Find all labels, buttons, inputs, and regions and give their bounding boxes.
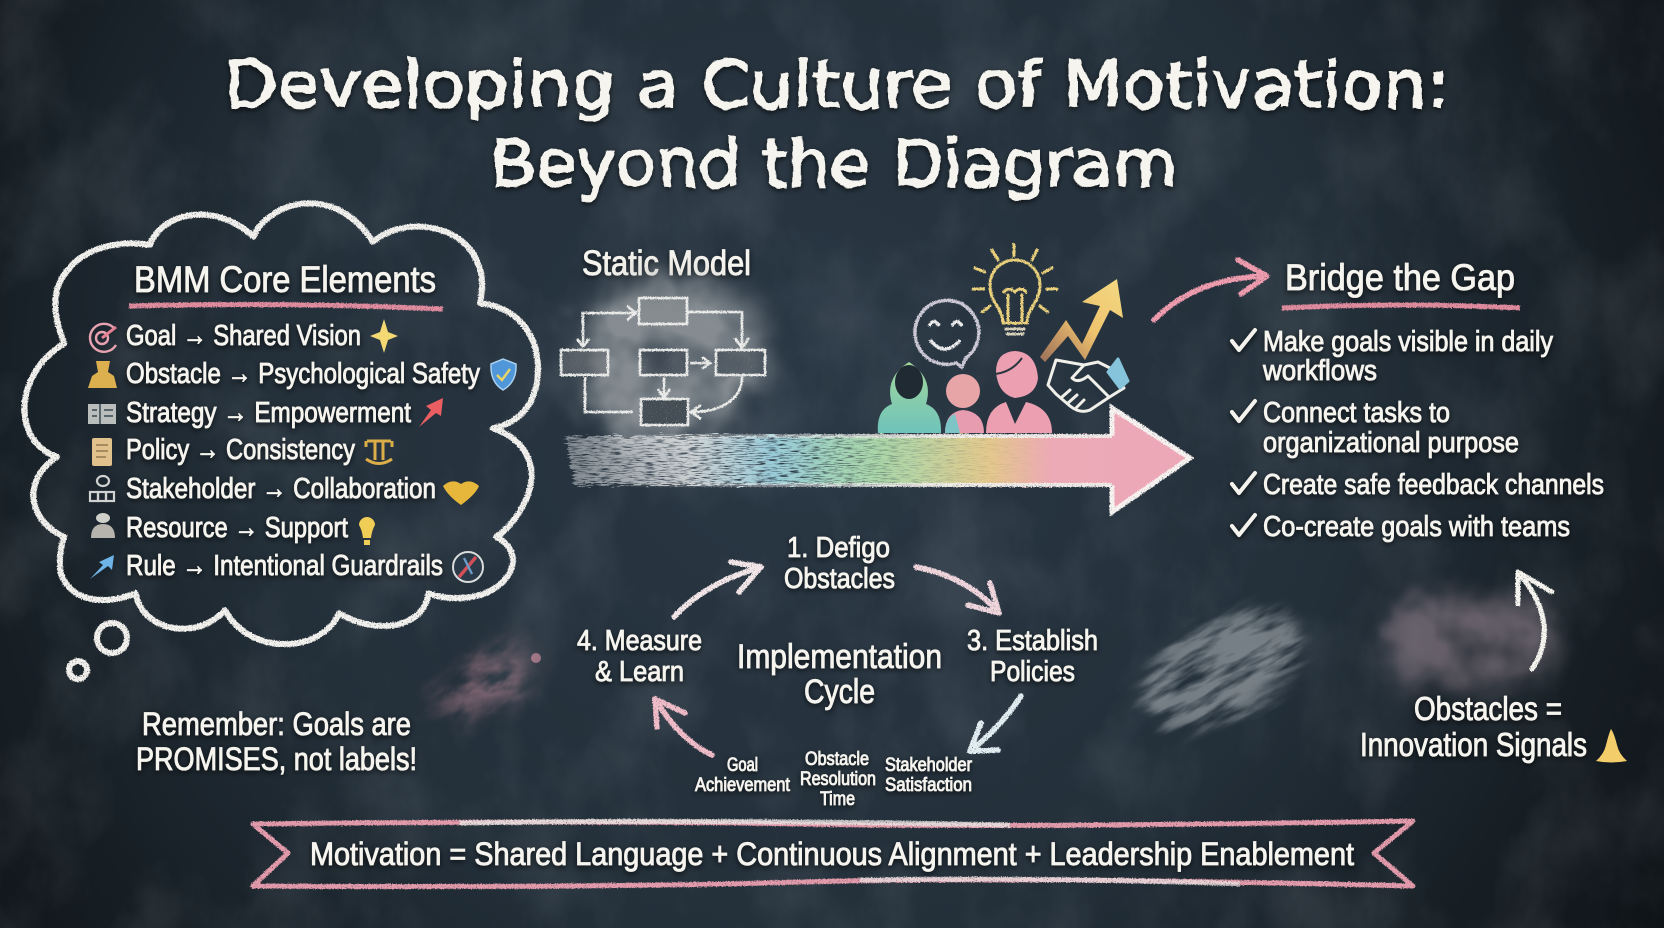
pink arrow to bridge the gap — [1154, 260, 1267, 320]
person: child — [945, 374, 984, 433]
static model label: Static Model — [582, 244, 751, 283]
note: obstacles are innovation signals: Innovation Signals — [1360, 726, 1587, 763]
panel: bridge the gap — [1232, 257, 1604, 543]
upward arrow from obstacles — [1518, 572, 1552, 669]
person: adult pink — [986, 351, 1052, 433]
measurement metrics: Achievement — [695, 775, 791, 796]
banner: motivation formula — [253, 821, 1413, 886]
title — [224, 49, 1450, 202]
heading: Bridge the Gap — [1285, 257, 1515, 298]
icon: bell — [1596, 729, 1627, 762]
reminder note — [136, 706, 417, 777]
reminder note: Remember: Goals are — [142, 706, 411, 742]
transformation rainbow arrow — [566, 408, 1190, 512]
people group — [878, 351, 1052, 433]
background chalk smudges — [435, 586, 1558, 750]
cycle steps — [577, 532, 1098, 688]
erased chalk cloud — [570, 274, 766, 442]
cloud outline — [25, 203, 538, 644]
left icons — [88, 324, 117, 579]
measurement metrics: Satisfaction — [885, 775, 972, 796]
icon: handshake — [1048, 359, 1128, 411]
cycle arrows — [655, 562, 1021, 755]
cycle center label — [737, 638, 942, 711]
title: Developing a Culture of Motivation: — [224, 49, 1450, 123]
cycle steps: 1. Defigo — [787, 532, 890, 564]
cycle center label: Implementation — [737, 638, 942, 676]
icon: rising arrow — [1040, 279, 1123, 362]
action list: Create safe feedback channels — [1263, 469, 1604, 501]
action list — [1262, 326, 1604, 543]
heading underline — [1282, 305, 1520, 308]
check marks — [1232, 330, 1255, 535]
element list: Stakeholder → Collaboration — [126, 473, 436, 505]
measurement metrics: Obstacle — [805, 749, 869, 770]
cycle steps: Obstacles — [784, 563, 895, 595]
note: obstacles are innovation signals — [1360, 690, 1627, 763]
action list: Make goals visible in daily — [1263, 326, 1553, 358]
panel: implementation cycle — [577, 532, 1098, 810]
measurement metrics: Stakeholder — [885, 755, 973, 776]
action list: workflows — [1262, 355, 1377, 387]
thought cloud: BMM core elements — [25, 203, 538, 679]
cycle center label: Cycle — [804, 673, 875, 711]
element list: Obstacle → Psychological Safety — [126, 358, 480, 390]
ribbon outline — [253, 821, 1413, 886]
streaked arrow shaft — [566, 436, 1114, 485]
reminder note: PROMISES, not labels! — [136, 741, 417, 777]
title: Beyond the Diagram — [490, 128, 1178, 202]
action list: Co-create goals with teams — [1263, 511, 1570, 543]
action list: Connect tasks to — [1263, 397, 1450, 429]
right icons — [359, 319, 516, 582]
arrow chalk outline — [620, 408, 1190, 512]
element list: Resource → Support — [126, 512, 348, 544]
element list — [126, 320, 480, 582]
measurement metrics: Resolution — [800, 769, 876, 790]
icon: smiley face — [915, 300, 979, 367]
measurement metrics: Time — [820, 789, 855, 810]
cycle steps: Policies — [990, 656, 1075, 688]
note: obstacles are innovation signals: Obstacles = — [1414, 690, 1562, 727]
measurement metrics: Goal — [727, 755, 758, 776]
flowchart boxes and arrows — [561, 298, 765, 425]
formula text: Motivation = Shared Language + Continuous Alignment + Leadership Enablement — [310, 836, 1354, 872]
measurement metrics — [695, 749, 973, 810]
icon: light bulb — [973, 244, 1057, 334]
heading: BMM Core Elements: BMM Core Elements — [134, 259, 436, 300]
element list: Rule → Intentional Guardrails — [126, 550, 443, 582]
action list: organizational purpose — [1263, 427, 1519, 459]
heading underline — [129, 305, 443, 309]
thought bubbles — [69, 623, 127, 679]
person: teal hooded — [878, 362, 941, 433]
cycle steps: & Learn — [595, 656, 684, 688]
cycle steps: 3. Establish — [967, 625, 1098, 657]
element list: Strategy → Empowerment — [126, 397, 411, 429]
cycle steps: 4. Measure — [577, 625, 702, 657]
solid arrow body and head — [770, 408, 1190, 512]
element list: Policy → Consistency — [126, 434, 355, 466]
element list: Goal → Shared Vision — [126, 320, 361, 352]
static flow diagram — [561, 274, 766, 442]
